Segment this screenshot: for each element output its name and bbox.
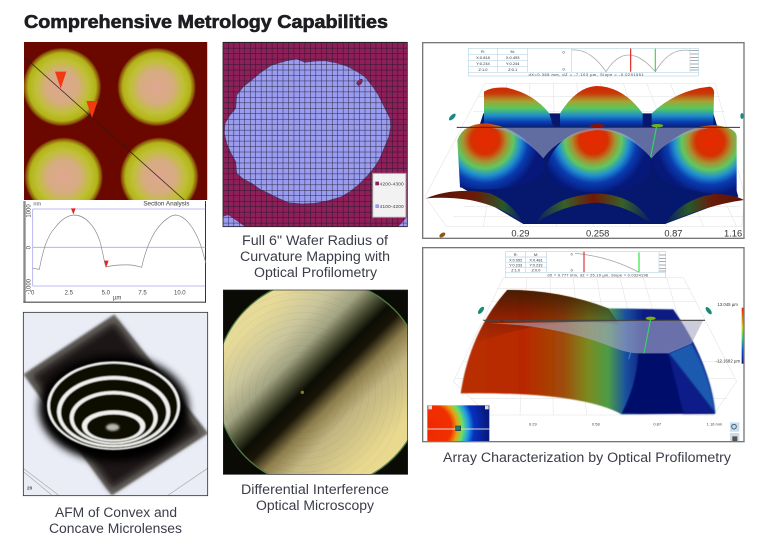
caption: wafer curvature bbox=[240, 233, 390, 280]
panel: section analysis line chart bbox=[23, 201, 206, 303]
caption: AFM: AFM of Convex and bbox=[55, 505, 177, 520]
measurement readout table: Y:0.244 bbox=[476, 61, 491, 66]
zoom and pan tool icons bbox=[730, 422, 739, 442]
caption: differential interference: Optical Microscopy bbox=[256, 498, 374, 513]
measurement readout table: M: bbox=[534, 253, 538, 257]
measurement readout table bbox=[506, 252, 666, 278]
panel: section analysis line chart: 10.0 bbox=[174, 291, 186, 297]
measurement readout table: 0 bbox=[571, 269, 573, 273]
panel: section analysis line chart: µm bbox=[113, 296, 121, 302]
teal handles bbox=[478, 306, 484, 314]
title: Comprehensive Metrology Capabilities bbox=[24, 12, 388, 32]
measurement readout table: Y:0.233 bbox=[509, 263, 522, 267]
x-axis values: 0.58 bbox=[592, 421, 601, 426]
lens surface bbox=[461, 290, 715, 414]
measurement readout table: X:0.818 bbox=[476, 55, 491, 60]
inset top view bbox=[427, 405, 489, 442]
colour scale bbox=[716, 302, 744, 364]
measurement readout table: Y:0.244 bbox=[506, 61, 520, 66]
measurement readout table: Z:1.0 bbox=[511, 268, 520, 272]
caption: wafer curvature: Full 6" Wafer Radius of bbox=[242, 233, 388, 248]
measurement readout table: X:0.052 bbox=[509, 258, 522, 262]
panel: wafer radius of curvature map bbox=[223, 42, 407, 227]
front dome row bbox=[457, 123, 544, 189]
panel: section analysis line chart: Section Analysis bbox=[143, 201, 189, 208]
measurement readout table: X:0.481 bbox=[529, 258, 543, 262]
colour scale: -12.1682 µm bbox=[716, 359, 740, 364]
measurement readout table: Z:0.0 bbox=[532, 268, 540, 272]
x-axis values bbox=[529, 423, 722, 426]
panel: wafer radius of curvature map: 4200-4300 bbox=[380, 181, 404, 186]
3D bounding grid bbox=[453, 278, 737, 415]
panel: AFM microlens top-view image bbox=[23, 42, 207, 216]
measurement readout table: X:0.453 bbox=[506, 55, 520, 60]
measurement readout table: R: bbox=[514, 253, 518, 257]
measurement readout table bbox=[468, 48, 698, 77]
panel: wafer radius of curvature map: 4100-4200 bbox=[380, 204, 404, 209]
measurement readout table: 0 bbox=[571, 253, 573, 257]
measurement readout table: 0 bbox=[563, 67, 566, 72]
caption: differential interference bbox=[241, 482, 389, 513]
panel: section analysis line chart: 2.5 bbox=[65, 291, 74, 297]
measurement readout table: Y:0.233 bbox=[529, 263, 542, 267]
panel: AFM ring interference image: 20 bbox=[27, 486, 33, 491]
section line and marker bbox=[456, 126, 740, 128]
panel: AFM ring interference image bbox=[23, 312, 208, 496]
x-axis values: 1.16 bbox=[724, 229, 742, 239]
panel: differential interference microscopy image bbox=[223, 290, 408, 475]
measurement readout table: R: bbox=[481, 49, 485, 54]
teal and orange handles bbox=[448, 114, 456, 120]
rear dome row bbox=[484, 86, 714, 127]
translucent cross-section plane bbox=[488, 127, 712, 158]
x-axis values bbox=[512, 230, 742, 236]
measurement readout table: 0 bbox=[563, 49, 566, 54]
x-axis values: 1.16 mm bbox=[707, 421, 723, 426]
x-axis values: 0.29 bbox=[529, 421, 538, 426]
x-axis values: 0.258 bbox=[586, 229, 609, 239]
panel: 3D microlens array profile bbox=[423, 43, 745, 239]
interference rings bbox=[47, 361, 180, 450]
colour scale: 13.045 µm bbox=[717, 302, 738, 307]
x-axis values: 0.87 bbox=[653, 421, 662, 426]
caption: differential interference: Differential Interference bbox=[241, 482, 389, 497]
measurement readout table: Z:1.0 bbox=[478, 67, 488, 72]
x-axis values: 0.29 bbox=[511, 229, 529, 239]
measurement readout table: Z:0.1 bbox=[508, 67, 518, 72]
section line and marker bbox=[483, 320, 705, 321]
3D bounding grid bbox=[425, 83, 745, 227]
caption: wafer curvature: Optical Profilometry bbox=[254, 265, 377, 280]
caption: wafer curvature: Curvature Mapping with bbox=[240, 249, 390, 264]
navy floor bbox=[460, 113, 738, 224]
panel: 3D single lens profile bbox=[423, 248, 744, 442]
caption: AFM bbox=[49, 505, 182, 536]
measurement readout table: M: bbox=[510, 49, 515, 54]
panel: section analysis line chart: 0 bbox=[27, 245, 33, 249]
caption: AFM: Concave Microlenses bbox=[49, 521, 182, 536]
near crescent caps bbox=[426, 191, 523, 224]
panel: section analysis line chart: 7.5 bbox=[138, 291, 147, 297]
panel: section analysis line chart: nm bbox=[33, 202, 41, 208]
panel: section analysis line chart: 1000 bbox=[27, 204, 33, 218]
measurement readout table: dX=0.365 mm, dZ = -7.103 µm, Slope = -0.0291551 bbox=[529, 73, 644, 77]
panel: section analysis line chart: -1000 bbox=[27, 278, 33, 294]
x-axis values: 0.87 bbox=[664, 229, 682, 239]
measurement readout table: dX = 0.777 mm, dZ = 25.19 µm, Slope = 0.0324196 bbox=[547, 273, 648, 277]
panel: section analysis line chart: 5.0 bbox=[102, 291, 111, 297]
panel: section analysis line chart: 0 bbox=[31, 291, 35, 297]
caption: array characterization: Array Characterization by Optical Profilometry bbox=[443, 450, 731, 465]
